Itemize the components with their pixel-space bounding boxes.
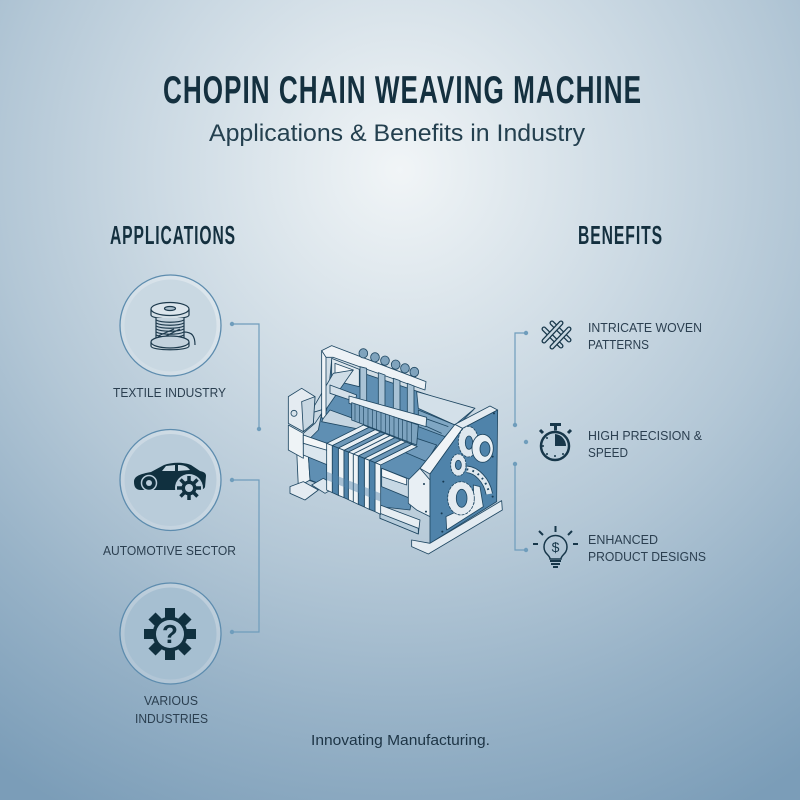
- panel: applications connectors: [230, 322, 261, 634]
- icon: light bulb with dollar: $: [552, 539, 560, 555]
- comb: [349, 396, 427, 445]
- icon: gear with question mark in circle: [120, 583, 221, 684]
- icon: woven pattern: [544, 323, 569, 347]
- label: automotive sector: AUTOMOTIVE SECTOR: [103, 543, 236, 558]
- rollers: [303, 435, 412, 498]
- heading: benefits: BENEFITS: [578, 220, 663, 250]
- icon: stopwatch: [540, 424, 571, 460]
- heading: applications: APPLICATIONS: [110, 220, 236, 250]
- label: various industries: INDUSTRIES: [135, 711, 208, 726]
- left foot and leg: [290, 450, 337, 500]
- label: various industries: VARIOUS: [144, 693, 198, 708]
- text: enhanced product designs: [588, 532, 706, 564]
- icon: thread spool in circle: [120, 275, 221, 376]
- base rails: [380, 505, 420, 534]
- panel: benefits connectors: [513, 331, 528, 552]
- footer tagline: Innovating Manufacturing.: [311, 733, 490, 749]
- back frame: [322, 346, 426, 430]
- illustration: weaving machine: [288, 346, 502, 554]
- icon: light bulb with dollar: [533, 526, 578, 567]
- icon: car with gear in circle: [120, 430, 221, 530]
- text: high precision and speed: HIGH PRECISION &: [588, 428, 702, 443]
- text: enhanced product designs: ENHANCED: [588, 532, 658, 547]
- text: intricate woven patterns: [588, 320, 702, 352]
- subtitle: Applications & Benefits in Industry: [209, 120, 586, 147]
- text: high precision and speed: SPEED: [588, 445, 628, 460]
- text: intricate woven patterns: PATTERNS: [588, 337, 649, 352]
- chain belts: [327, 425, 417, 514]
- text: high precision and speed: [588, 428, 702, 460]
- text: enhanced product designs: PRODUCT DESIGNS: [588, 549, 706, 564]
- label: textile industry: TEXTILE INDUSTRY: [113, 385, 226, 400]
- text: intricate woven patterns: INTRICATE WOVEN: [588, 320, 702, 335]
- icon: gear with question mark in circle: ?: [162, 619, 178, 649]
- label: various industries: [135, 693, 208, 726]
- gears: [448, 426, 493, 515]
- rear body: [308, 358, 475, 510]
- right end plate: [408, 406, 502, 554]
- left box: [288, 388, 322, 458]
